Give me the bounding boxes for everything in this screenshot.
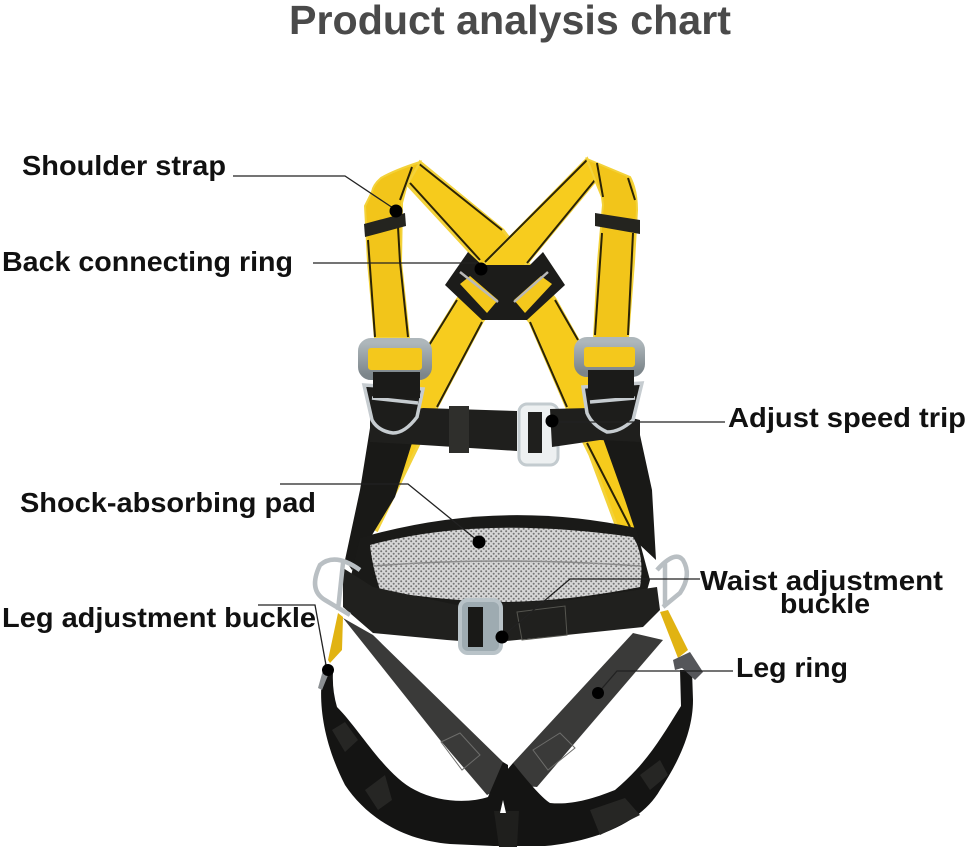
callout: leg ring — [592, 652, 848, 699]
right waist D-ring — [657, 557, 687, 607]
callout: shock-absorbing pad: Shock-absorbing pad — [20, 487, 316, 518]
yellow leg connectors — [328, 610, 688, 663]
left waist D-ring — [315, 560, 360, 615]
right chest belt — [550, 408, 640, 447]
shoulder keepers — [364, 213, 640, 237]
chest buckle — [519, 404, 558, 465]
leg ring hardware — [318, 652, 703, 690]
left shoulder strap — [365, 162, 420, 338]
grey leg straps — [343, 618, 663, 795]
callout: waist adjustment buckle — [496, 565, 943, 644]
callout: waist adjustment buckle: buckle — [780, 588, 870, 619]
harness illustration — [315, 159, 703, 847]
yellow diagonal strap (top-left to bottom-right) — [407, 162, 640, 530]
chest belt — [370, 406, 517, 453]
callout: adjust speed trip: Adjust speed trip — [728, 402, 966, 433]
leg pad webbing patches — [332, 722, 668, 835]
yellow diagonal strap (top-right to bottom-left) — [368, 159, 596, 530]
callout: leg adjustment buckle: Leg adjustment buckle — [2, 602, 316, 633]
D-ring cross bars — [372, 398, 635, 403]
callout: back connecting ring — [2, 246, 488, 277]
left chest D-ring — [364, 385, 423, 433]
back connecting plate — [445, 252, 565, 320]
waist belt — [343, 568, 660, 643]
callout: leg ring: Leg ring — [736, 652, 848, 683]
callout: shoulder strap: Shoulder strap — [22, 150, 226, 181]
callout: shock-absorbing pad — [20, 484, 486, 548]
crotch keeper — [494, 811, 519, 847]
callout: adjust speed trip — [546, 402, 966, 433]
right shoulder strap — [587, 159, 637, 338]
crotch notch — [500, 800, 506, 813]
black straps down to waist — [345, 428, 656, 570]
left adjuster buckle — [363, 343, 427, 398]
callout: back connecting ring: Back connecting ring — [2, 246, 293, 277]
left leg pad — [321, 670, 508, 846]
right leg pad — [507, 670, 693, 846]
right chest D-ring — [583, 383, 642, 432]
callout: leg adjustment buckle — [2, 602, 334, 676]
callout: waist adjustment buckle: Waist adjustment — [700, 565, 943, 596]
waist pad — [350, 515, 650, 615]
right adjuster buckle — [579, 342, 640, 398]
callout: shoulder strap — [22, 150, 402, 218]
waist buckle — [460, 600, 501, 653]
